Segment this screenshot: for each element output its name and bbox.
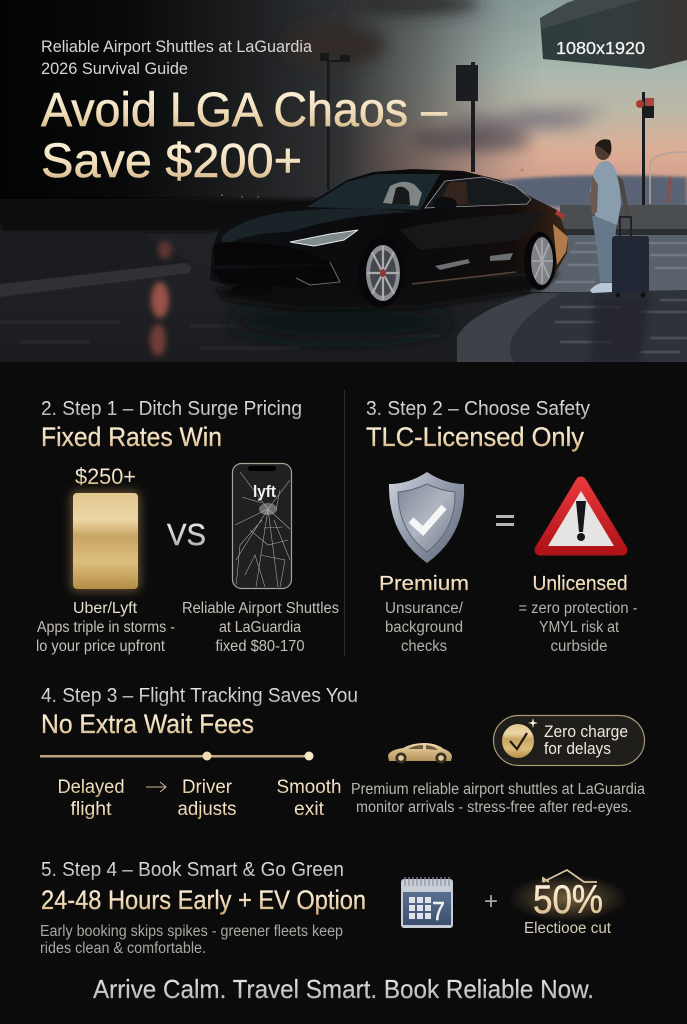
pavement highlights xyxy=(555,300,687,352)
front tyre xyxy=(231,284,273,296)
right pavement xyxy=(510,290,687,362)
icon: calendar xyxy=(401,877,453,928)
panel: step 1 xyxy=(36,397,339,655)
percentage caption: Electiooe cut xyxy=(524,920,612,937)
step 3 paragraph: Premium reliable airport shuttles at LaGuardia xyxy=(351,781,645,798)
unlicensed caption: = zero protection - xyxy=(518,600,638,617)
icon: warning triangle xyxy=(540,482,622,550)
timeline labels: flight xyxy=(70,799,112,820)
arrow xyxy=(146,782,166,792)
cracked phone xyxy=(232,464,292,588)
barrier kerb xyxy=(565,229,687,235)
badge text: Zero charge xyxy=(544,723,628,741)
hero title: Save $200+ xyxy=(41,135,302,188)
right signal post xyxy=(636,92,654,205)
suitcase xyxy=(612,217,649,298)
step 4 paragraph: rides clean & comfortable. xyxy=(40,940,206,957)
black car xyxy=(210,169,568,308)
mirror xyxy=(433,197,457,208)
shirt xyxy=(590,161,621,225)
left road patch xyxy=(2,232,140,233)
rear wheel xyxy=(524,232,556,290)
percentage: 50% xyxy=(533,878,603,922)
front wheel xyxy=(358,238,404,308)
shuttle caption: fixed $80-170 xyxy=(216,638,305,655)
step 4 paragraph xyxy=(40,923,343,957)
hero eyebrow: Reliable Airport Shuttles at LaGuardia xyxy=(41,38,313,56)
far arm xyxy=(617,175,630,216)
dusk sky xyxy=(346,0,687,212)
head xyxy=(595,140,611,160)
gold price card xyxy=(71,491,140,591)
hero title: Avoid LGA Chaos – xyxy=(41,84,447,137)
panel: step 4 xyxy=(40,858,628,957)
tail light xyxy=(555,210,565,220)
timeline xyxy=(40,752,314,760)
uber/lyft caption xyxy=(36,600,175,655)
unlicensed caption: YMYL risk at xyxy=(539,619,620,636)
timeline labels: Delayed xyxy=(58,777,124,798)
hero size tag: 1080x1920 xyxy=(556,38,645,58)
shuttle caption: at LaGuardia xyxy=(219,619,301,636)
uber/lyft caption: Uber/Lyft xyxy=(73,600,138,617)
timeline labels: Driver xyxy=(182,777,233,798)
door highlights xyxy=(400,212,545,250)
uber/lyft caption: Apps triple in storms - xyxy=(37,619,175,636)
unlicensed caption: curbside xyxy=(550,638,608,655)
panel: step 2 xyxy=(366,397,638,655)
vs label: VS xyxy=(167,517,206,552)
wet road behind car xyxy=(530,235,687,292)
step 1 label: 2. Step 1 – Ditch Surge Pricing xyxy=(41,397,302,420)
closing line: Arrive Calm. Travel Smart. Book Reliable Now. xyxy=(93,974,594,1004)
premium caption: background xyxy=(385,619,463,636)
driver through window xyxy=(442,182,468,205)
left curb xyxy=(0,263,191,297)
premium caption xyxy=(385,600,464,655)
step 3 paragraph: monitor arrivals - stress-free after red-eyes. xyxy=(356,799,632,816)
intake trim xyxy=(296,262,340,285)
lamp post xyxy=(320,53,350,190)
wet road texture xyxy=(0,322,440,348)
savings stat xyxy=(508,870,628,937)
step 4 label: 5. Step 4 – Book Smart & Go Green xyxy=(41,858,344,881)
unlicensed heading: Unlicensed xyxy=(532,573,628,595)
step 3 label: 4. Step 3 – Flight Tracking Saves You xyxy=(41,684,358,707)
person reflection xyxy=(590,295,650,362)
step 4 paragraph: Early booking skips spikes - greener fleets keep xyxy=(40,923,343,940)
left horizon band xyxy=(0,199,340,232)
hair xyxy=(595,139,612,155)
legs xyxy=(592,216,617,282)
hero eyebrow: 2026 Survival Guide xyxy=(41,60,188,78)
sill line xyxy=(412,272,516,284)
canopy xyxy=(540,0,687,69)
badge: zero charge xyxy=(494,716,644,766)
headlight xyxy=(290,230,358,246)
timeline labels: exit xyxy=(294,799,325,820)
shoe xyxy=(590,283,612,293)
rear orange reflection xyxy=(553,224,568,265)
step 2 label: 3. Step 2 – Choose Safety xyxy=(366,397,591,420)
sill reflections xyxy=(435,253,513,270)
lyft logo: lyft xyxy=(253,482,276,501)
ground xyxy=(0,225,575,362)
icon: gold car xyxy=(388,743,452,764)
icon: gold check xyxy=(502,718,538,758)
side window xyxy=(425,177,531,208)
seat interior xyxy=(392,187,410,205)
step 2 heading: TLC-Licensed Only xyxy=(366,422,585,452)
equals sign xyxy=(496,515,514,526)
price label: $250+ xyxy=(75,464,136,489)
seat silhouette in window xyxy=(383,182,422,206)
grille xyxy=(214,242,335,265)
hero title xyxy=(41,84,447,188)
icon: shield with check xyxy=(389,472,464,563)
top storm clouds xyxy=(285,0,480,65)
timeline labels: adjusts xyxy=(178,799,236,820)
far street light xyxy=(650,152,687,204)
red road reflections xyxy=(150,241,172,356)
icon: calendar: 7 xyxy=(432,896,445,926)
hero eyebrow xyxy=(41,38,313,78)
timeline labels: Smooth xyxy=(276,777,342,798)
road streaks xyxy=(555,243,687,282)
left dark fade xyxy=(0,0,526,215)
premium caption: Unsurance/ xyxy=(385,600,464,617)
curb strip xyxy=(457,293,560,362)
shuttle caption xyxy=(182,600,339,655)
icon: roof xyxy=(543,870,597,882)
panel: step 3 xyxy=(40,684,645,820)
arm xyxy=(590,175,598,215)
traveller xyxy=(590,139,630,293)
step 3 paragraph xyxy=(351,781,645,816)
step 1 heading: Fixed Rates Win xyxy=(41,422,222,452)
step 4 heading: 24-48 Hours Early + EV Option xyxy=(41,885,366,915)
sign post xyxy=(456,62,478,172)
unlicensed caption xyxy=(518,600,638,655)
badge: zero charge: for delays xyxy=(544,740,611,758)
hero photo: car at airport curb xyxy=(0,0,687,362)
plus sign: + xyxy=(484,888,498,915)
lower intake xyxy=(212,265,340,288)
shuttle caption: Reliable Airport Shuttles xyxy=(182,600,339,617)
windshield xyxy=(307,174,440,210)
hood sheen xyxy=(222,208,413,242)
distant crane xyxy=(666,177,671,203)
distant blue bank xyxy=(490,175,687,207)
premium caption: checks xyxy=(401,638,447,655)
car floor reflection xyxy=(230,302,450,342)
far barrier xyxy=(560,205,687,229)
canopy edge xyxy=(540,0,640,29)
step 3 heading: No Extra Wait Fees xyxy=(41,709,254,739)
car shadow xyxy=(215,272,560,310)
timeline labels xyxy=(58,777,342,820)
sky clouds xyxy=(410,108,610,152)
premium heading: Premium xyxy=(379,573,469,595)
uber/lyft caption: lo your price upfront xyxy=(36,638,166,655)
distant horizon lights xyxy=(221,168,523,198)
car body xyxy=(210,169,568,287)
